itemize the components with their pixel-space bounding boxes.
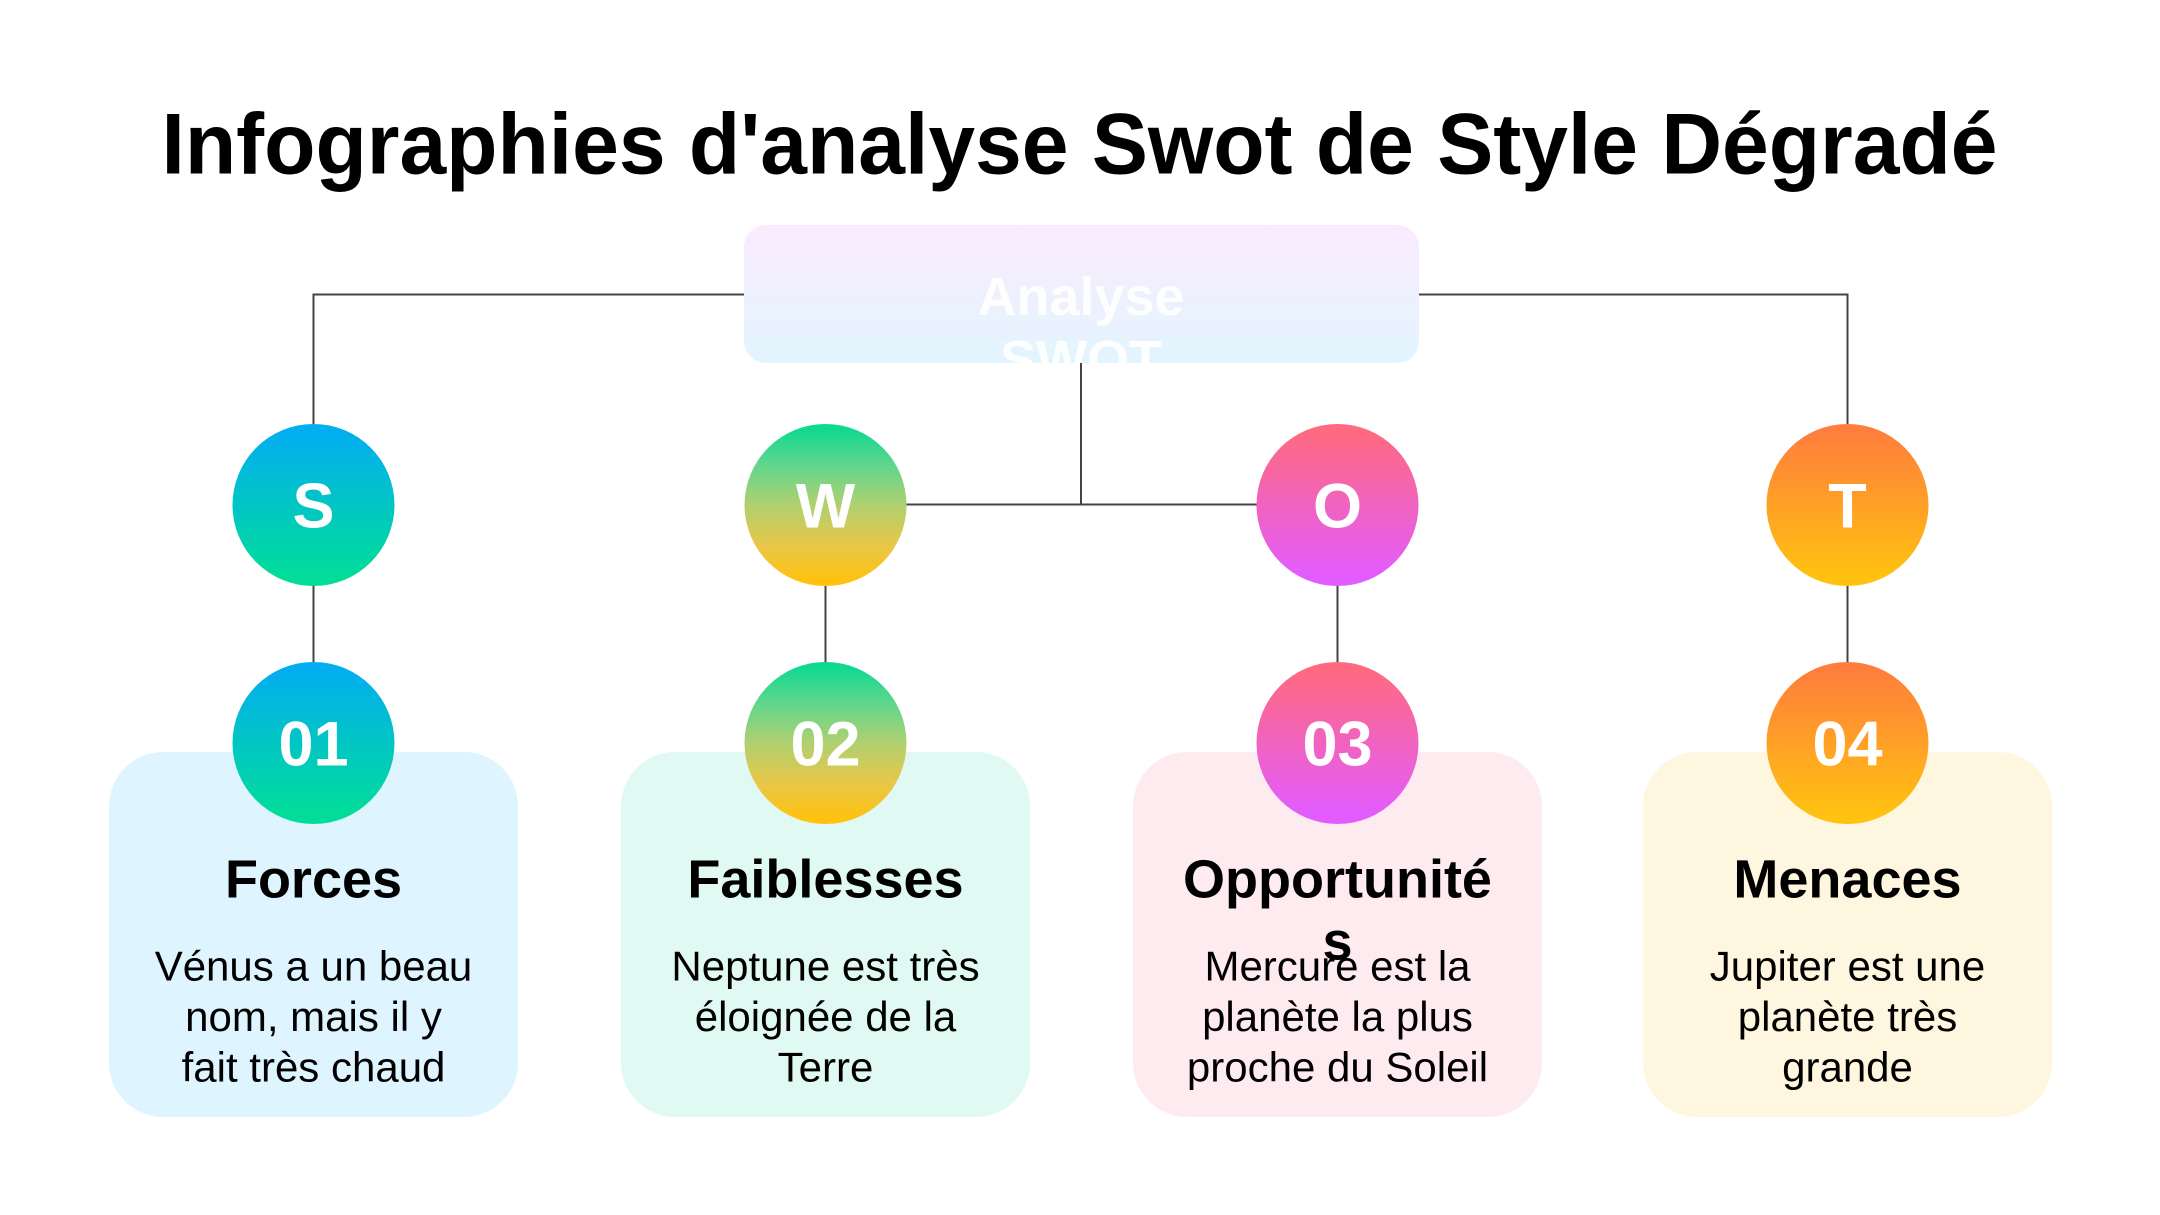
number circle 01 <box>232 662 394 824</box>
text block: Faiblesses: Neptune est très <box>671 943 980 990</box>
panel: Forces <box>109 752 518 1117</box>
letter circle O <box>1256 424 1418 586</box>
panel: Faiblesses <box>621 752 1030 1117</box>
text block: Forces: fait très chaud <box>182 1044 445 1091</box>
card background <box>621 752 1030 1117</box>
card background <box>1643 752 2052 1117</box>
number circle 01: 01 <box>278 710 349 780</box>
text block: Forces: Vénus a un beau <box>155 943 472 990</box>
letter circle S: S <box>292 472 335 542</box>
number circle 02 <box>744 662 906 824</box>
central box: Analyse SWOT <box>744 225 1419 363</box>
letter circle T <box>1766 424 1928 586</box>
heading: Forces: Forces <box>225 850 402 910</box>
text block: Menaces: planète très <box>1738 993 1957 1040</box>
central box: Analyse SWOT: Analyse <box>977 267 1185 327</box>
text block: Forces: nom, mais il y <box>185 993 442 1040</box>
letter circle W: W <box>796 472 856 542</box>
heading: Opportunités: Opportunité <box>1183 850 1492 910</box>
text block: Opportunités <box>1187 943 1488 1091</box>
letter circle W <box>744 424 906 586</box>
text block: Faiblesses: éloignée de la <box>695 993 957 1040</box>
text block: Faiblesses: Terre <box>778 1044 873 1091</box>
text block: Opportunités: planète la plus <box>1202 993 1473 1040</box>
number circle 03: 03 <box>1302 710 1373 780</box>
text block: Opportunités: Mercure est la <box>1204 943 1471 990</box>
number circle 03 <box>1256 662 1418 824</box>
title: Infographies d'analyse Swot de Style Dégradé <box>162 96 1998 192</box>
heading: Opportunités: s <box>1322 912 1353 972</box>
card background <box>109 752 518 1117</box>
heading: Faiblesses: Faiblesses <box>687 850 964 910</box>
number circle 02: 02 <box>790 710 861 780</box>
number circle 04 <box>1766 662 1928 824</box>
letter circle S <box>232 424 394 586</box>
heading: Opportunités <box>1183 850 1492 972</box>
panel: Opportunités <box>1133 752 1542 1117</box>
letter circle O: O <box>1313 472 1362 542</box>
text block: Menaces <box>1710 943 1985 1091</box>
text block: Faiblesses <box>671 943 980 1091</box>
text block: Menaces: grande <box>1782 1044 1913 1091</box>
central box: Analyse SWOT: SWOT <box>1000 330 1162 390</box>
text block: Menaces: Jupiter est une <box>1710 943 1985 990</box>
panel: Menaces <box>1643 752 2052 1117</box>
text block: Forces <box>155 943 472 1091</box>
card background <box>1133 752 1542 1117</box>
number circle 04: 04 <box>1812 710 1883 780</box>
letter circle T: T <box>1828 472 1867 542</box>
text block: Opportunités: proche du Soleil <box>1187 1044 1488 1091</box>
heading: Menaces: Menaces <box>1733 850 1962 910</box>
connector lines <box>314 294 1848 662</box>
